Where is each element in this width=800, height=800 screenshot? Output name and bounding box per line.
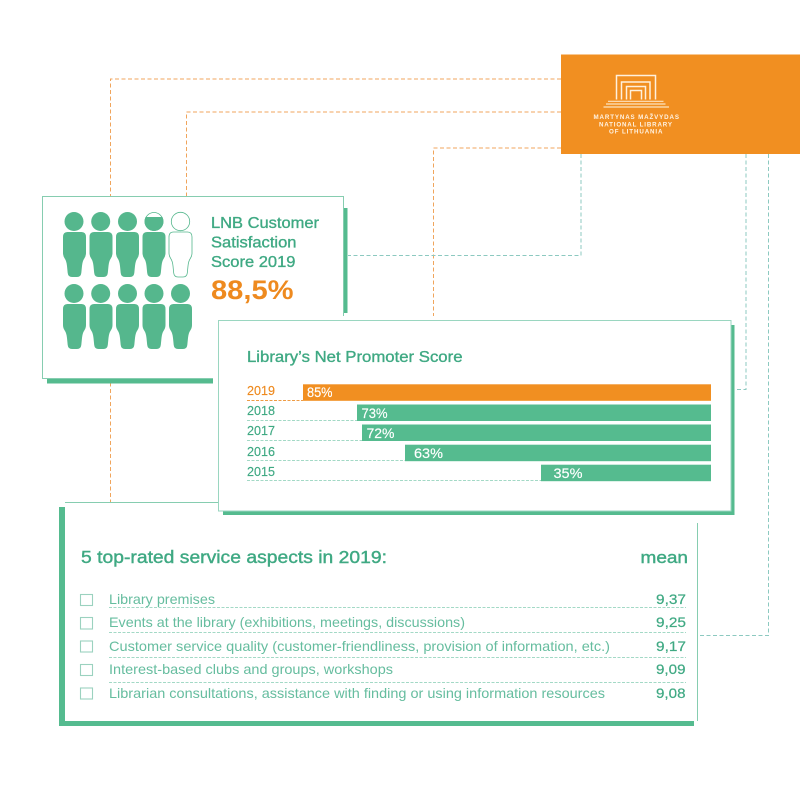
bar value labels: 63% bbox=[414, 446, 443, 461]
row mean values: 9,25 bbox=[656, 614, 686, 630]
row labels: Librarian consultations, assistance with finding or using information resources bbox=[109, 685, 605, 701]
dashed connector: logo to net promoter panel right side bbox=[735, 154, 746, 390]
year labels: 2016 bbox=[247, 445, 275, 459]
dashed connector: logo to satisfaction panel right side bbox=[348, 154, 581, 256]
panel: customer satisfaction bbox=[42, 196, 348, 384]
logo text: MARTYNAS MAŽVYDAS bbox=[594, 113, 679, 121]
year labels: 2015 bbox=[247, 465, 275, 479]
pictogram: ten people, 88.5% filled bbox=[63, 212, 192, 349]
heading: satisfaction score bbox=[211, 215, 319, 271]
year labels: 2018 bbox=[247, 404, 275, 418]
row labels: Customer service quality (customer-friendliness, provision of information, etc.) bbox=[109, 638, 610, 654]
bar value labels: 72% bbox=[366, 426, 394, 441]
year labels: 2017 bbox=[247, 424, 275, 438]
column heading: mean: mean bbox=[640, 549, 688, 567]
row mean values bbox=[656, 591, 686, 701]
bar value labels bbox=[307, 385, 582, 481]
logo text: OF LITHUANIA bbox=[609, 128, 663, 136]
score value: 88,5% bbox=[211, 275, 294, 305]
dashed connector: logo to net promoter panel bbox=[434, 148, 561, 320]
panel: five top-rated service aspects bbox=[59, 495, 738, 726]
year labels: 2019 bbox=[247, 384, 275, 398]
row labels bbox=[109, 591, 610, 701]
logo block bbox=[561, 54, 800, 154]
bar value labels: 35% bbox=[554, 466, 582, 481]
row labels: Library premises bbox=[109, 591, 215, 607]
heading: service aspects: 5 top-rated service aspects in 2019: bbox=[81, 547, 387, 567]
dashed connector: logo to customer satisfaction panel (outer) bbox=[110, 79, 561, 502]
row mean values: 9,37 bbox=[656, 591, 686, 607]
row labels: Interest-based clubs and groups, workshops bbox=[109, 661, 393, 677]
checkboxes bbox=[80, 594, 92, 699]
heading: satisfaction score: LNB Customer bbox=[211, 215, 319, 232]
logo text bbox=[594, 113, 679, 136]
heading: satisfaction score: Satisfaction bbox=[211, 234, 296, 252]
dashed connector: logo to customer satisfaction panel (inner) bbox=[186, 112, 561, 196]
panel: net promoter score bbox=[213, 316, 736, 515]
row mean values: 9,08 bbox=[656, 685, 686, 701]
heading: net promoter score: Library’s Net Promoter Score bbox=[247, 349, 462, 366]
row dividers bbox=[109, 608, 686, 682]
dashed connector: logo to service aspects panel bbox=[697, 154, 768, 636]
row labels: Events at the library (exhibitions, meetings, discussions) bbox=[109, 614, 465, 630]
row mean values: 9,09 bbox=[656, 661, 686, 677]
icon: library arches bbox=[604, 76, 669, 107]
row mean values: 9,17 bbox=[656, 638, 686, 654]
bar value labels: 85% bbox=[307, 385, 332, 400]
year labels bbox=[247, 384, 275, 479]
logo text: NATIONAL LIBRARY bbox=[599, 121, 673, 128]
heading: satisfaction score: Score 2019 bbox=[211, 254, 296, 271]
bar chart: score by year bbox=[247, 384, 711, 481]
bar value labels: 73% bbox=[362, 406, 388, 421]
